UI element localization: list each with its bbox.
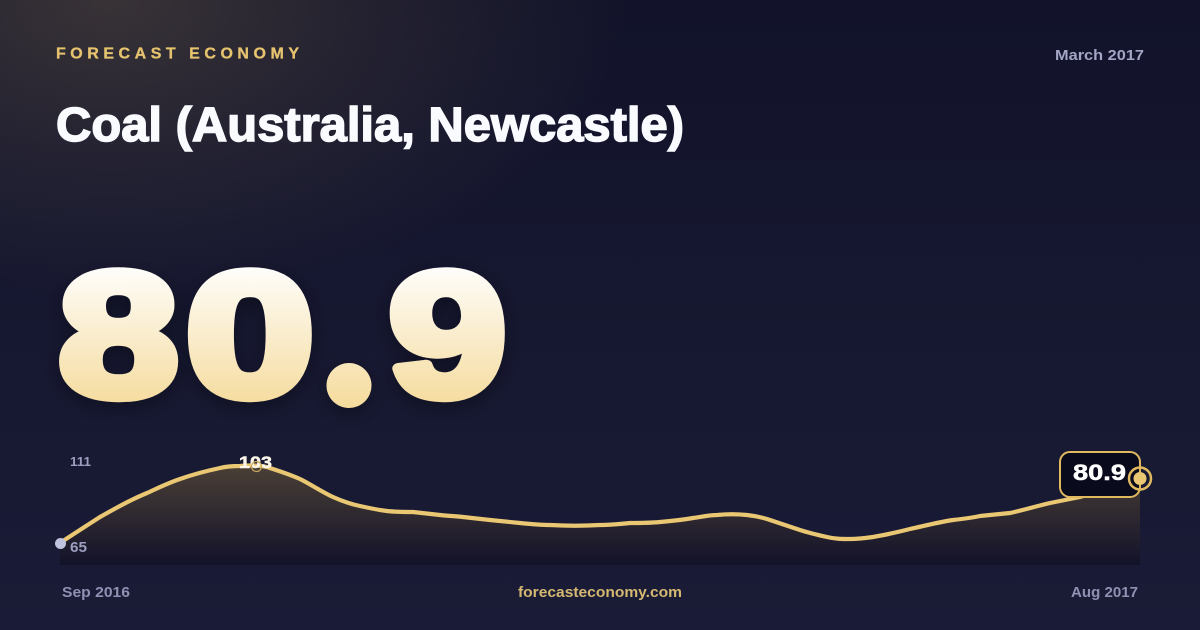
website: forecasteconomy.com <box>518 585 682 601</box>
price line <box>60 465 1140 543</box>
peak marker <box>252 462 262 472</box>
peak label: 103 <box>239 453 272 472</box>
end value callout: 80.9 <box>1073 460 1126 485</box>
headline value: 9 <box>389 238 506 433</box>
title: Coal (Australia, Newcastle) <box>56 99 684 152</box>
headline value: 8 <box>59 238 178 433</box>
headline value: . <box>338 365 349 409</box>
end value callout <box>1060 452 1140 497</box>
headline value: 0 <box>186 238 314 433</box>
date label: March 2017 <box>1055 47 1144 64</box>
area fill <box>60 465 1140 565</box>
axis max label: 111 <box>70 454 91 469</box>
headline value <box>59 238 506 433</box>
sparkline chart <box>55 452 1151 565</box>
end date label: Aug 2017 <box>1071 585 1138 601</box>
start date label: Sep 2016 <box>62 585 130 601</box>
end marker <box>1129 468 1151 490</box>
brand label: FORECAST ECONOMY <box>56 46 299 62</box>
start point <box>55 538 66 549</box>
axis min label: 65 <box>70 540 87 556</box>
